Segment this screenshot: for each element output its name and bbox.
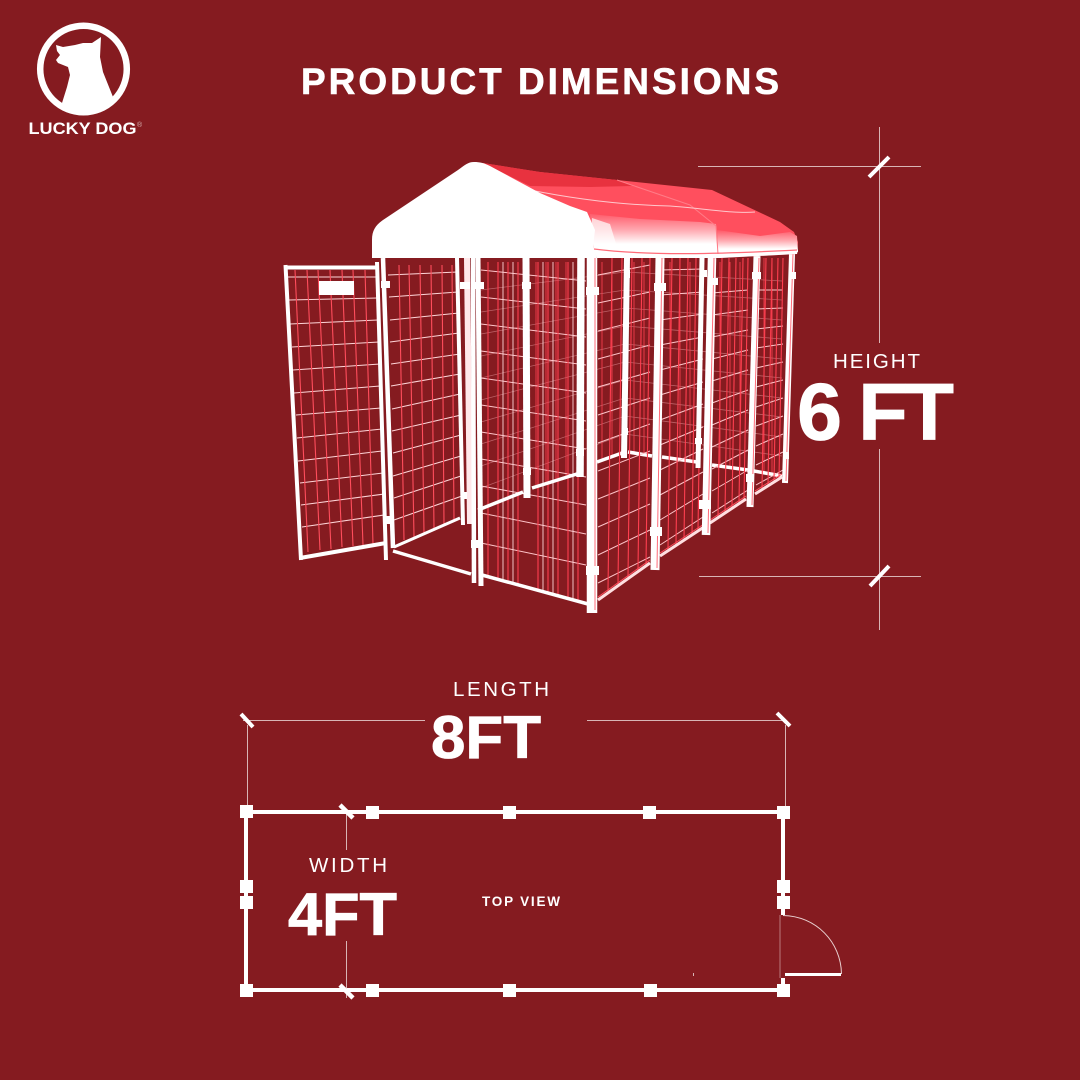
door mesh columns	[295, 270, 373, 552]
height ticks	[869, 157, 889, 586]
logo dog silhouette	[56, 37, 113, 112]
kennel illustration	[284, 162, 798, 613]
plan stray dot	[693, 973, 694, 976]
roof fold line	[530, 190, 755, 212]
width label: WIDTH	[309, 854, 387, 877]
height guide lines	[698, 127, 921, 630]
plan door leaf	[785, 973, 841, 976]
right wall rows	[598, 265, 783, 583]
length ticks	[241, 713, 790, 727]
right wall rail red shadow	[598, 474, 782, 597]
door mesh rows	[288, 277, 384, 527]
logo ring	[40, 26, 127, 112]
height value: 6 FT	[797, 368, 954, 458]
canopy roof	[372, 162, 798, 258]
height dimension	[698, 127, 954, 630]
plan walls	[246, 812, 783, 990]
length guide lines	[243, 720, 786, 808]
door panel	[284, 265, 386, 560]
plan connector squares	[240, 805, 790, 997]
roof upper dark band	[483, 163, 632, 187]
door frame	[284, 265, 386, 560]
width guide lines	[346, 812, 348, 998]
logo registered mark: ®	[137, 121, 143, 129]
left panel bottom rail	[394, 518, 460, 547]
left panel mesh columns	[399, 265, 454, 540]
white wire columns	[503, 262, 573, 599]
title: PRODUCT DIMENSIONS	[301, 61, 779, 102]
post connectors	[381, 270, 796, 575]
front wall rows	[481, 270, 586, 565]
roof sheen: second panel	[717, 230, 798, 252]
mesh: far wall verticals	[536, 258, 772, 488]
height label: HEIGHT	[833, 350, 920, 373]
frame posts	[377, 254, 793, 613]
width value: 4FT	[288, 881, 397, 948]
right wall bottom rails	[598, 477, 782, 600]
roof sheen: white corner highlight	[592, 218, 618, 250]
mesh: far walls	[481, 272, 782, 488]
right wall columns	[608, 258, 783, 591]
length label: LENGTH	[453, 678, 549, 701]
roof hem	[594, 250, 798, 258]
roof side panel	[483, 163, 798, 258]
logo: Lucky Dog	[28, 26, 143, 138]
top view plan	[240, 805, 842, 997]
width dimension	[288, 805, 397, 998]
right wall mesh	[598, 258, 783, 600]
roof front white face	[372, 162, 597, 258]
roof lower hem line	[594, 249, 797, 254]
logo wordmark: LUCKY DOG	[28, 120, 136, 138]
floor rails	[393, 452, 782, 604]
left panel mesh rows	[388, 272, 462, 520]
width ticks	[340, 805, 353, 998]
length value: 8FT	[431, 704, 541, 771]
length dimension	[241, 678, 790, 808]
door label plate	[319, 281, 354, 295]
front wall mesh	[393, 262, 782, 604]
plan door swing arc	[783, 916, 842, 974]
plan door threshold	[779, 915, 781, 978]
top view label: TOP VIEW	[482, 894, 560, 909]
post red highlights	[595, 254, 793, 610]
front wall columns	[488, 262, 578, 601]
roof mid-panel seam	[617, 180, 718, 254]
roof sheen: first panel	[590, 214, 718, 252]
left side panel	[388, 265, 462, 547]
